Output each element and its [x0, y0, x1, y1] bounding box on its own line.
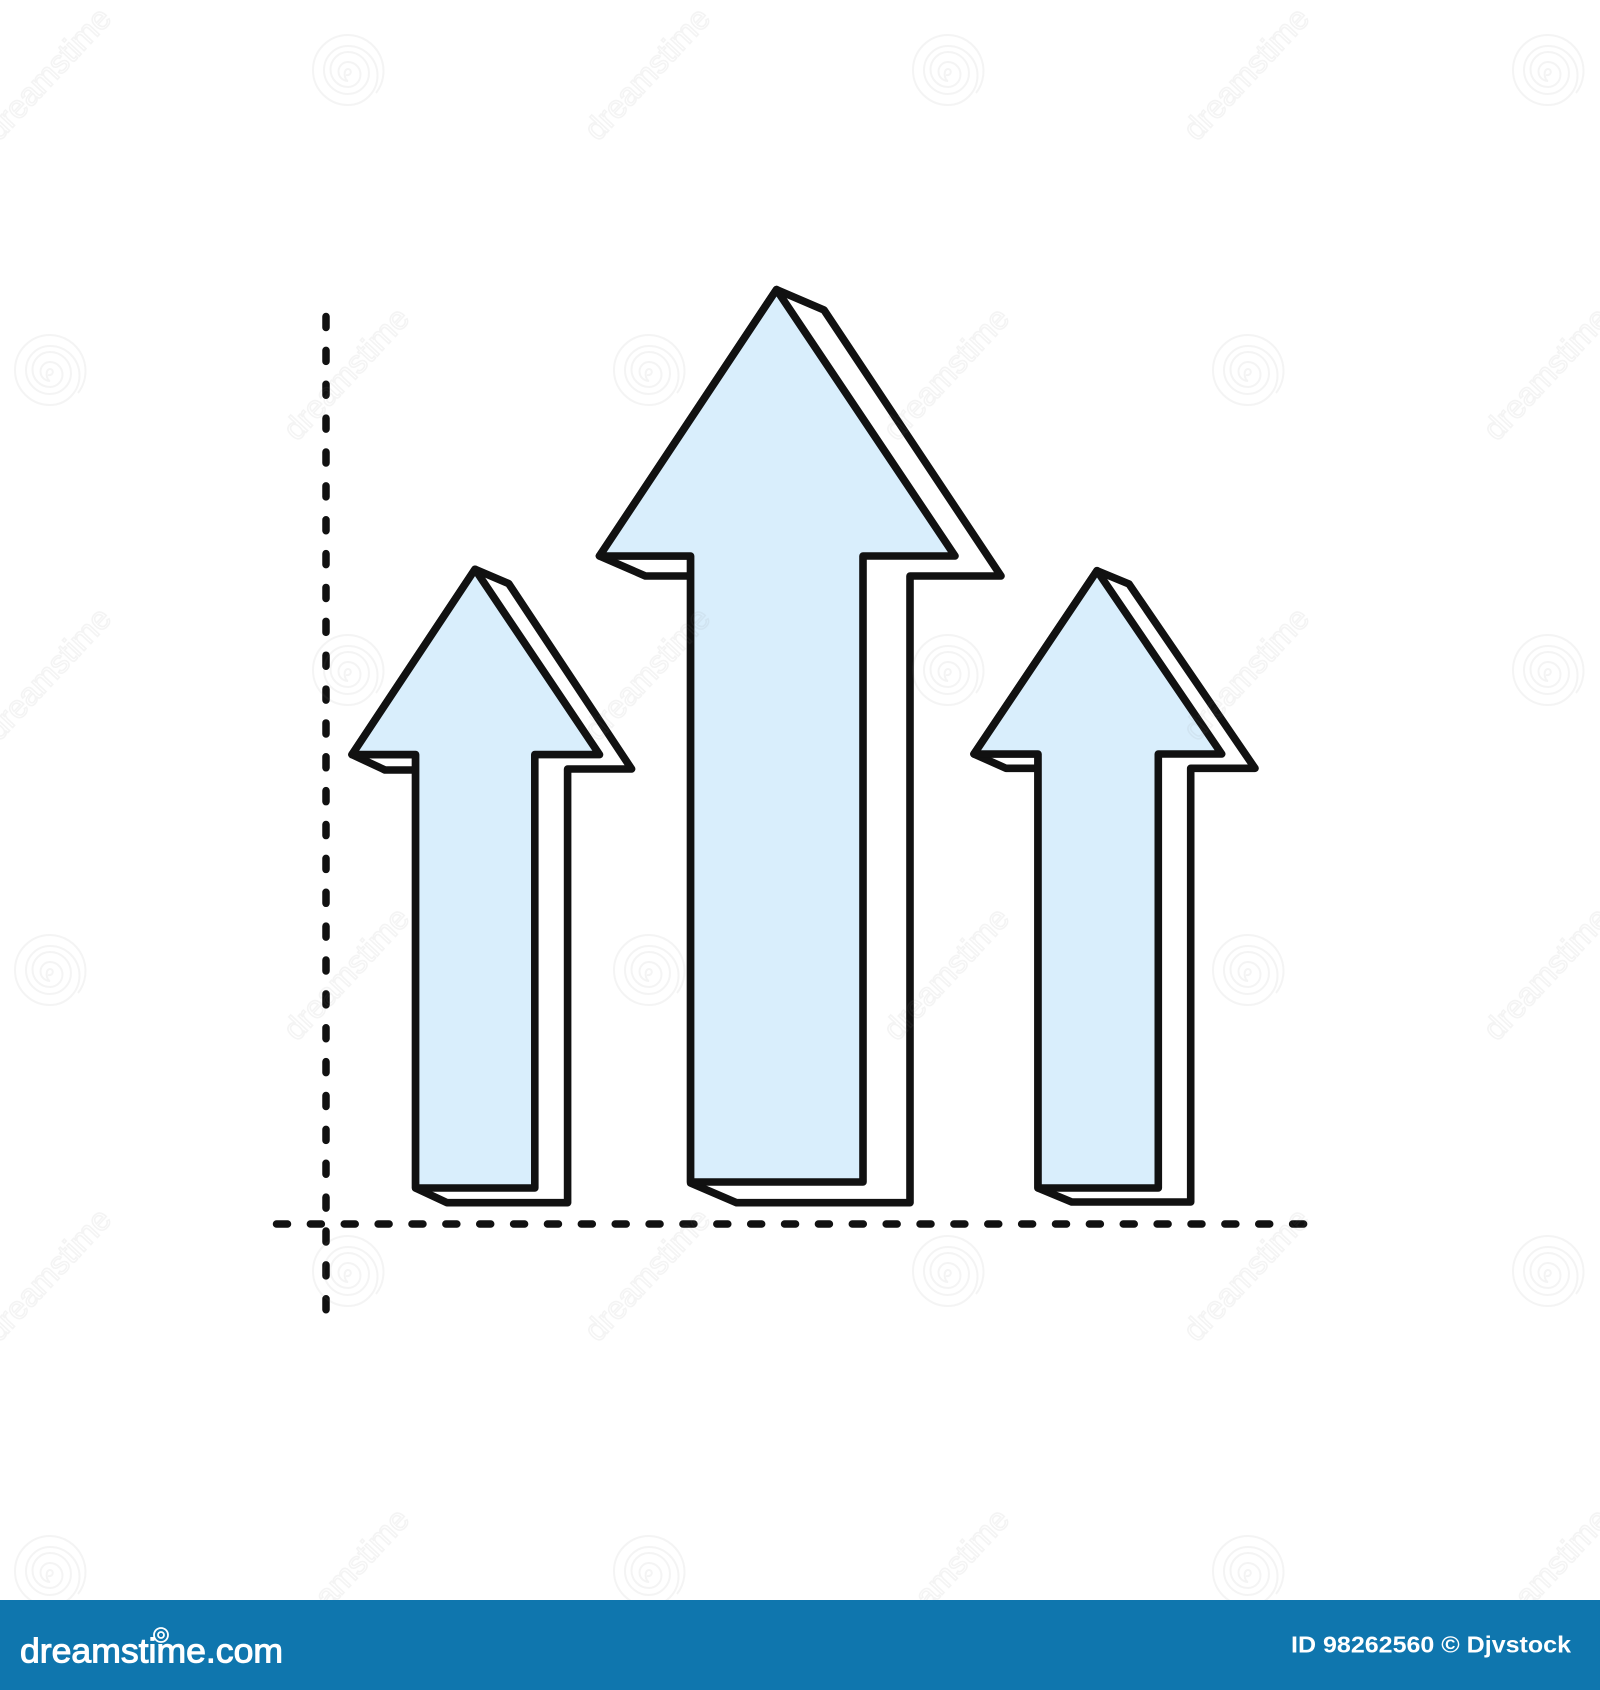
- watermark text: dreamstime: [577, 1201, 717, 1348]
- footer image id and credit: ID 98262560 © Djvstock: [1291, 1632, 1571, 1658]
- watermark text: dreamstime: [577, 0, 717, 147]
- watermark text: dreamstime: [577, 600, 717, 747]
- footer bar: [0, 1600, 1600, 1690]
- watermark text: dreamstime: [876, 1501, 1016, 1648]
- watermark text: dreamstime: [1176, 0, 1316, 147]
- arrow: left short arrow: [352, 569, 632, 1203]
- arrow: centre tall arrow: [600, 290, 1001, 1203]
- arrow: right short arrow: [974, 571, 1255, 1202]
- footer logo text: dreamstime.com: [20, 1632, 283, 1670]
- watermark text: dreamstime: [276, 1501, 416, 1648]
- watermark text: dreamstime: [1176, 1201, 1316, 1348]
- watermark text: dreamstime: [276, 300, 416, 447]
- watermark text: dreamstime: [876, 300, 1016, 447]
- watermark text: dreamstime: [1176, 600, 1316, 747]
- watermark text: dreamstime: [276, 900, 416, 1047]
- watermark text: dreamstime: [876, 900, 1016, 1047]
- vertical dashed axis: [322, 316, 330, 1312]
- footer logo spiral: [154, 1628, 168, 1642]
- horizontal dashed axis: [276, 1220, 1306, 1228]
